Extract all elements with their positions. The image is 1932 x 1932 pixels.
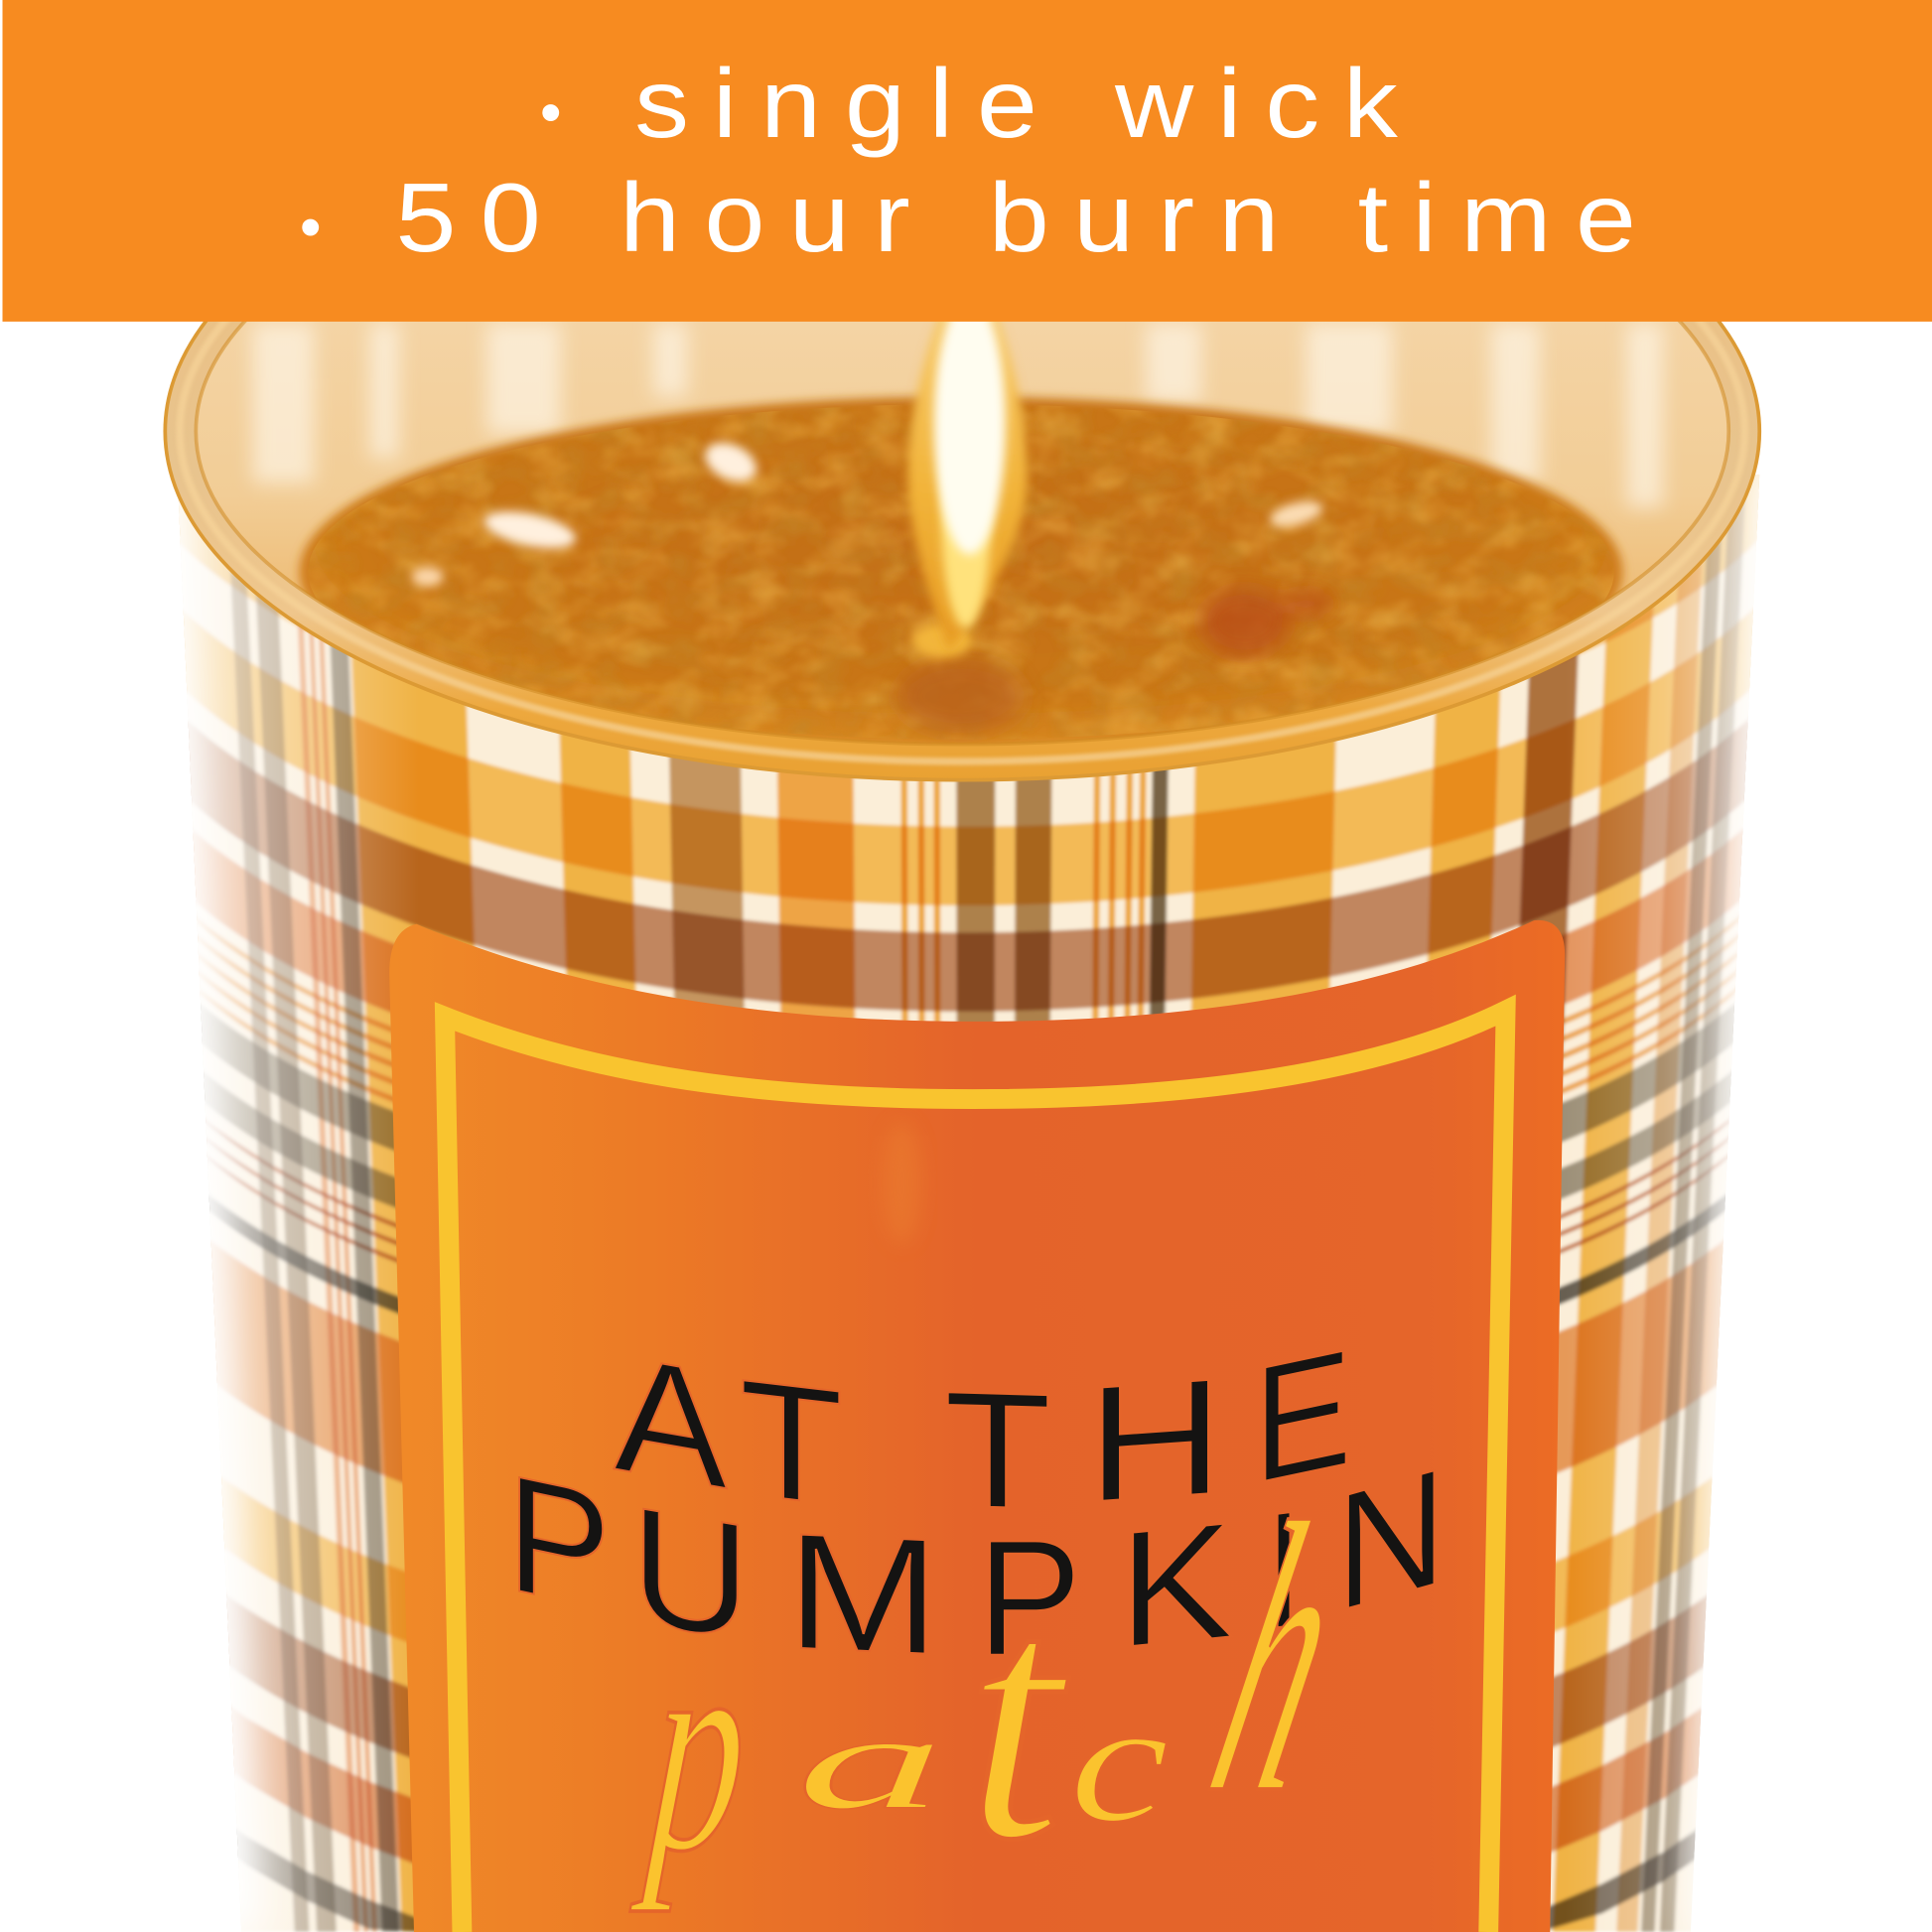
heading: AT THE: T bbox=[944, 1356, 1051, 1544]
heading: PUMPKIN: K bbox=[1119, 1488, 1233, 1683]
banner line: single wick: single wick bbox=[634, 50, 1399, 158]
heading: PUMPKIN: U bbox=[630, 1471, 751, 1676]
heading: PUMPKIN: N bbox=[1335, 1432, 1447, 1647]
label sheen bbox=[889, 1135, 916, 1231]
banner line: 50 hour burn time: • bbox=[300, 193, 322, 261]
script word: patch bbox=[629, 1444, 1377, 1912]
product label bbox=[389, 920, 1565, 1932]
rim highlight bbox=[180, 101, 1744, 761]
wax dark red patch bbox=[1200, 588, 1330, 656]
horizontal plaid bands bbox=[179, 475, 1759, 1932]
banner line: single wick: • bbox=[540, 78, 562, 147]
flame bbox=[908, 246, 1027, 650]
heading: AT THE: T bbox=[740, 1344, 843, 1541]
heading: PUMPKIN: P bbox=[506, 1440, 611, 1645]
top orange banner bbox=[2, 0, 1932, 322]
heading: AT THE: A bbox=[614, 1320, 728, 1525]
melted wax pool bbox=[296, 394, 1626, 752]
heading: AT THE: E bbox=[1253, 1312, 1352, 1519]
heading: AT THE: H bbox=[1087, 1344, 1224, 1538]
vertical plaid stripes bbox=[226, 492, 1746, 1932]
glass interior and melted wax bbox=[198, 322, 1727, 745]
side light wash bbox=[111, 469, 1824, 1932]
glass rim bbox=[165, 82, 1759, 780]
script word: patch: c bbox=[1069, 1666, 1170, 1858]
script word: patch: a bbox=[796, 1688, 945, 1837]
wax highlights bbox=[412, 435, 1325, 587]
wick base bbox=[897, 623, 1026, 733]
heading: PUMPKIN bbox=[506, 1432, 1447, 1691]
heading: PUMPKIN: M bbox=[786, 1499, 940, 1690]
rim inner edge bbox=[196, 118, 1728, 745]
heading: PUMPKIN: I bbox=[1266, 1475, 1303, 1665]
script word: patch: p bbox=[629, 1586, 759, 1912]
heading: PUMPKIN: P bbox=[977, 1506, 1082, 1691]
script word: patch: h bbox=[1181, 1444, 1377, 1874]
gold foil border bbox=[445, 1011, 1506, 1932]
interior glass reflections bbox=[252, 323, 1663, 507]
heading: AT THE bbox=[614, 1312, 1352, 1544]
candle jar body with plaid wrap bbox=[179, 475, 1759, 1932]
script word: patch: t bbox=[966, 1529, 1074, 1911]
banner line: 50 hour burn time: 50 hour burn time bbox=[395, 165, 1636, 273]
